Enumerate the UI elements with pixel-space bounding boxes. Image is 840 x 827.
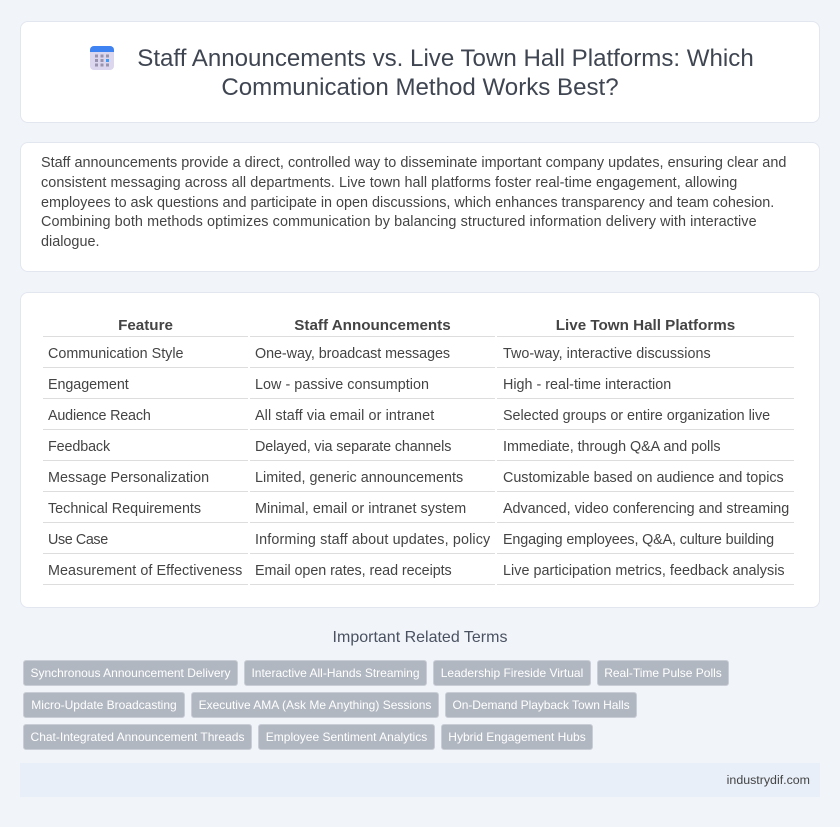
row: Measurement of Effectiveness xyxy=(48,563,785,579)
text block: introduction: Combining both methods optimizes communication by balancing structured information delivery with interactive xyxy=(41,214,757,230)
tag xyxy=(445,692,637,718)
title xyxy=(137,45,754,101)
tag: Executive AMA (Ask Me Anything) Sessions xyxy=(199,698,431,712)
footer text: industrydif.com xyxy=(727,773,810,787)
title: Staff Announcements vs. Live Town Hall Platforms: Which xyxy=(137,45,754,72)
row: Feedback: Immediate, through Q&A and polls xyxy=(503,439,721,455)
tag: Chat-Integrated Announcement Threads xyxy=(31,730,244,744)
text block: introduction: dialogue. xyxy=(41,234,99,250)
row: Use Case: Informing staff about updates, policy xyxy=(255,532,490,548)
row: Message Personalization: Limited, generic announcements xyxy=(255,470,463,486)
row: Use Case xyxy=(48,532,774,548)
row: Communication Style: Two-way, interactive discussions xyxy=(503,346,711,362)
icon: calendar xyxy=(90,46,114,70)
row: Communication Style: One-way, broadcast messages xyxy=(255,346,450,362)
tag: On-Demand Playback Town Halls xyxy=(452,698,630,712)
tag xyxy=(23,660,238,686)
table header: Staff Announcements xyxy=(294,317,451,334)
row: Use Case: Engaging employees, Q&A, culture building xyxy=(503,532,774,548)
row: Feedback: Feedback xyxy=(48,439,110,455)
row: Audience Reach xyxy=(48,408,770,424)
tags: related terms xyxy=(23,660,729,750)
tag xyxy=(597,660,729,686)
panel: introduction xyxy=(20,142,820,272)
row: Technical Requirements xyxy=(48,501,789,517)
row: Technical Requirements: Technical Requirements xyxy=(48,501,201,517)
tag: Hybrid Engagement Hubs xyxy=(448,730,586,744)
text block: introduction: consistent messaging across all departments. Live town hall platforms foster real-time engagement, allowing xyxy=(41,175,737,191)
heading: related terms: Important Related Terms xyxy=(333,629,507,646)
tag: Employee Sentiment Analytics xyxy=(266,730,427,744)
title: Communication Method Works Best? xyxy=(221,74,619,101)
tag xyxy=(244,660,427,686)
tag xyxy=(23,692,185,718)
text block: introduction: Staff announcements provide a direct, controlled way to disseminate important company updates, ensuring clear and xyxy=(41,155,786,171)
row: Measurement of Effectiveness: Measurement of Effectiveness xyxy=(48,563,242,579)
row: Message Personalization: Message Personalization xyxy=(48,470,209,486)
tag xyxy=(23,724,252,750)
row: Communication Style: Communication Style xyxy=(48,346,184,362)
tag: Real-Time Pulse Polls xyxy=(604,666,722,680)
row: Engagement xyxy=(48,377,671,393)
table header: Live Town Hall Platforms xyxy=(556,317,735,334)
panel: title xyxy=(20,21,820,123)
footer bar xyxy=(20,763,820,797)
row: Use Case: Use Case xyxy=(48,532,108,548)
row: Engagement: High - real-time interaction xyxy=(503,377,671,393)
tag xyxy=(441,724,593,750)
tag: Synchronous Announcement Delivery xyxy=(30,666,231,680)
row: Technical Requirements: Advanced, video conferencing and streaming xyxy=(503,501,789,517)
row: Message Personalization xyxy=(48,470,784,486)
row: Feedback: Delayed, via separate channels xyxy=(255,439,451,455)
row: Engagement: Engagement xyxy=(48,377,129,393)
text block: introduction xyxy=(41,155,786,250)
row: Measurement of Effectiveness: Live participation metrics, feedback analysis xyxy=(503,563,785,579)
row: Engagement: Low - passive consumption xyxy=(255,377,429,393)
text block: introduction: employees to ask questions and participate in open discussions, which enhances transparency and team cohesion. xyxy=(41,195,774,211)
row: Feedback xyxy=(48,439,721,455)
tag xyxy=(433,660,591,686)
tag: Interactive All-Hands Streaming xyxy=(251,666,420,680)
panel: comparison table xyxy=(20,292,820,608)
tag xyxy=(191,692,439,718)
row: Message Personalization: Customizable based on audience and topics xyxy=(503,470,784,486)
row: Measurement of Effectiveness: Email open rates, read receipts xyxy=(255,563,452,579)
row: Audience Reach: All staff via email or intranet xyxy=(255,408,434,424)
tag: Micro-Update Broadcasting xyxy=(31,698,177,712)
row: Audience Reach: Audience Reach xyxy=(48,408,151,424)
row: Communication Style xyxy=(48,346,711,362)
row: Audience Reach: Selected groups or entire organization live xyxy=(503,408,770,424)
table header: Feature xyxy=(118,317,173,334)
row: Technical Requirements: Minimal, email or intranet system xyxy=(255,501,466,517)
tag xyxy=(258,724,435,750)
tag: Leadership Fireside Virtual xyxy=(441,666,583,680)
table header xyxy=(118,317,735,334)
